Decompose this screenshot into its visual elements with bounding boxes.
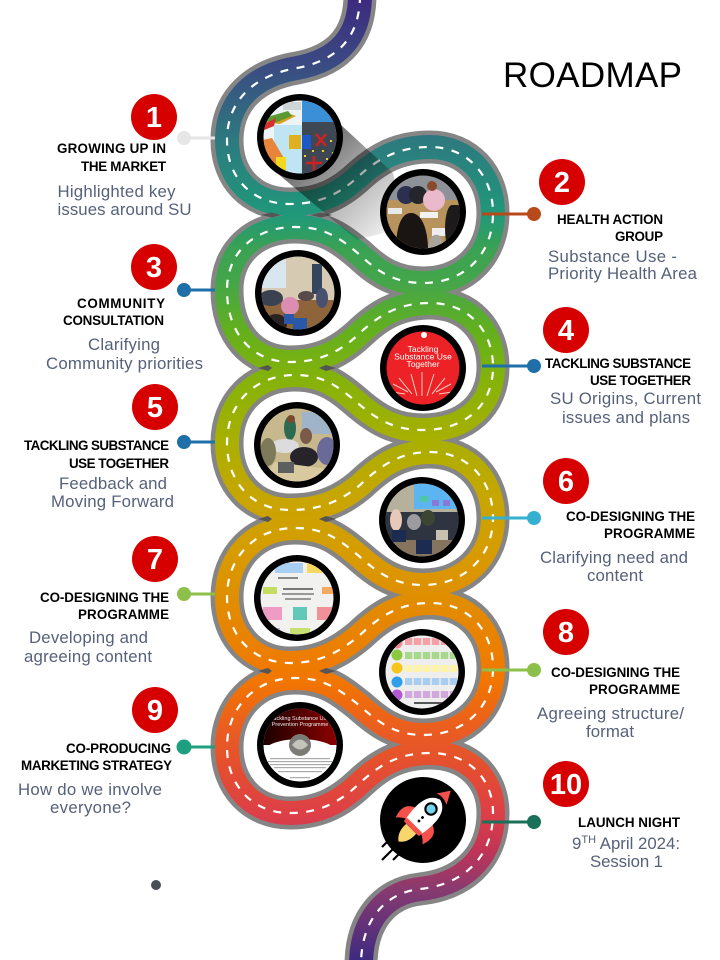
badge 7: 7 (147, 544, 163, 576)
description 6: Clarifying need and (540, 548, 688, 567)
description 2 (548, 247, 698, 283)
step 4: tackling substance use together (482, 307, 701, 427)
photo 9: prevention programme flyer (257, 702, 343, 788)
badge 10 (543, 761, 589, 807)
description 9 (18, 780, 162, 817)
description 10: TH (581, 834, 596, 846)
badge 1 (131, 94, 177, 140)
description 8: format (586, 722, 634, 741)
badge 8: 8 (558, 617, 574, 649)
heading 4: USE TOGETHER (590, 373, 691, 388)
heading 4 (545, 356, 691, 388)
step 3: community consultation (46, 244, 215, 373)
step 1: growing up in the market (57, 94, 215, 219)
description 9: How do we involve (18, 780, 162, 799)
badge 2: 2 (554, 167, 570, 199)
long shadow from first photo (277, 125, 402, 240)
badge 10: 10 (550, 769, 582, 801)
heading 4: TACKLING SUBSTANCE (545, 356, 691, 371)
photo 7: programme planning board (254, 555, 340, 641)
connector 1 (177, 131, 215, 145)
heading 9 (21, 741, 172, 773)
heading 5: TACKLING SUBSTANCE (24, 438, 169, 453)
description 1: issues around SU (58, 200, 192, 219)
heading 1: GROWING UP IN (57, 141, 166, 156)
description 5 (51, 474, 174, 511)
photo 1: colourful drawing (257, 94, 343, 180)
heading 7: CO-DESIGNING THE (40, 590, 169, 605)
connector 4 (482, 359, 541, 373)
description 4: issues and plans (562, 408, 690, 427)
description 5: Feedback and (59, 474, 167, 493)
heading 9: MARKETING STRATEGY (21, 758, 172, 773)
photo 4: tackling substance use together poster (380, 325, 466, 411)
connector 6 (482, 511, 541, 525)
badge 3 (131, 244, 177, 290)
badge 9 (132, 687, 178, 733)
heading 6: CO-DESIGNING THE (566, 509, 695, 524)
heading 8: PROGRAMME (589, 682, 680, 697)
heading 2 (557, 212, 663, 244)
description 9: everyone? (50, 798, 131, 817)
description 6: content (587, 566, 643, 585)
connector 3 (177, 283, 215, 297)
description 4: SU Origins, Current (550, 389, 701, 408)
description 10: April 2024: (596, 834, 680, 853)
step 8: co-designing the programme (482, 609, 684, 741)
photo 4: tackling substance use together poster: Substance Use (394, 352, 452, 362)
heading 3: CONSULTATION (63, 313, 164, 328)
description 8 (537, 704, 684, 741)
heading 7 (40, 590, 169, 622)
badge 6: 6 (558, 466, 574, 498)
badge 4 (543, 307, 589, 353)
step 9: co-producing marketing strategy (18, 687, 215, 817)
photo 4: tackling substance use together poster: Together (406, 359, 440, 369)
description 7: agreeing content (24, 647, 152, 666)
heading 5 (24, 438, 169, 471)
photo 6: co-design workshop with screen (379, 477, 465, 563)
description 3: Community priorities (46, 354, 203, 373)
description 10: Session 1 (590, 852, 663, 871)
badge 2 (539, 159, 585, 205)
description 5: Moving Forward (51, 492, 174, 511)
description 10: 9 (572, 834, 581, 853)
connector 5 (177, 435, 215, 449)
connector 10 (482, 815, 541, 829)
badge 3: 3 (146, 252, 162, 284)
connector 7 (177, 587, 215, 601)
description 4 (550, 389, 701, 427)
photo 3: community consultation room (255, 250, 341, 336)
photo 8: programme structure grid (379, 629, 465, 715)
photo 9: prevention programme flyer: Prevention Programme (272, 722, 328, 728)
step 5: tackling substance use together (24, 384, 215, 511)
description 7 (24, 628, 152, 666)
step 6: co-designing the programme (482, 458, 695, 585)
badge 9: 9 (147, 695, 163, 727)
heading 7: PROGRAMME (78, 607, 169, 622)
heading 3 (63, 296, 165, 328)
connector 8 (482, 663, 541, 677)
heading 2: HEALTH ACTION (557, 212, 663, 227)
heading 8: CO-DESIGNING THE (551, 665, 680, 680)
connector 9 (176, 740, 215, 754)
description 2: Priority Health Area (548, 264, 698, 283)
road junction wedges (258, 212, 336, 674)
badge 6 (543, 458, 589, 504)
description 3: Clarifying (88, 335, 160, 354)
heading 6 (566, 509, 695, 541)
stray dot (151, 880, 161, 890)
connector 2 (482, 207, 541, 221)
photo 2: meeting round table (380, 169, 466, 255)
heading 1 (57, 141, 167, 174)
description 1 (58, 182, 192, 219)
road (227, 0, 493, 960)
badge 8 (543, 609, 589, 655)
badge 1: 1 (146, 102, 162, 134)
description 10 (572, 834, 680, 871)
photo 9: prevention programme flyer: Tackling Substance Use (271, 716, 329, 722)
step 2: health action group (482, 159, 698, 283)
description 3 (46, 335, 203, 373)
photo 5: feedback meeting (254, 402, 340, 488)
description 6 (540, 548, 688, 585)
badge 5 (132, 384, 178, 430)
heading 6: PROGRAMME (604, 526, 695, 541)
badge 7 (132, 536, 178, 582)
heading 9: CO-PRODUCING (66, 741, 171, 756)
description 1: Highlighted key (58, 182, 176, 201)
heading 1: THE MARKET (81, 159, 167, 174)
icon: rocket (380, 775, 466, 863)
photo 4: tackling substance use together poster: Tackling (408, 344, 439, 354)
heading 2: GROUP (615, 229, 663, 244)
heading 5: USE TOGETHER (69, 456, 169, 471)
step 10: launch night (482, 761, 681, 871)
heading 8 (551, 665, 680, 697)
step 7: co-designing the programme (24, 536, 215, 666)
description 2: Substance Use - (548, 247, 677, 266)
heading 10: LAUNCH NIGHT (578, 815, 681, 830)
badge 4: 4 (558, 315, 574, 347)
description 8: Agreeing structure/ (537, 704, 684, 723)
description 7: Developing and (29, 628, 148, 647)
heading 3: COMMUNITY (77, 296, 165, 311)
title: ROADMAP (503, 56, 682, 95)
badge 5: 5 (147, 392, 163, 424)
